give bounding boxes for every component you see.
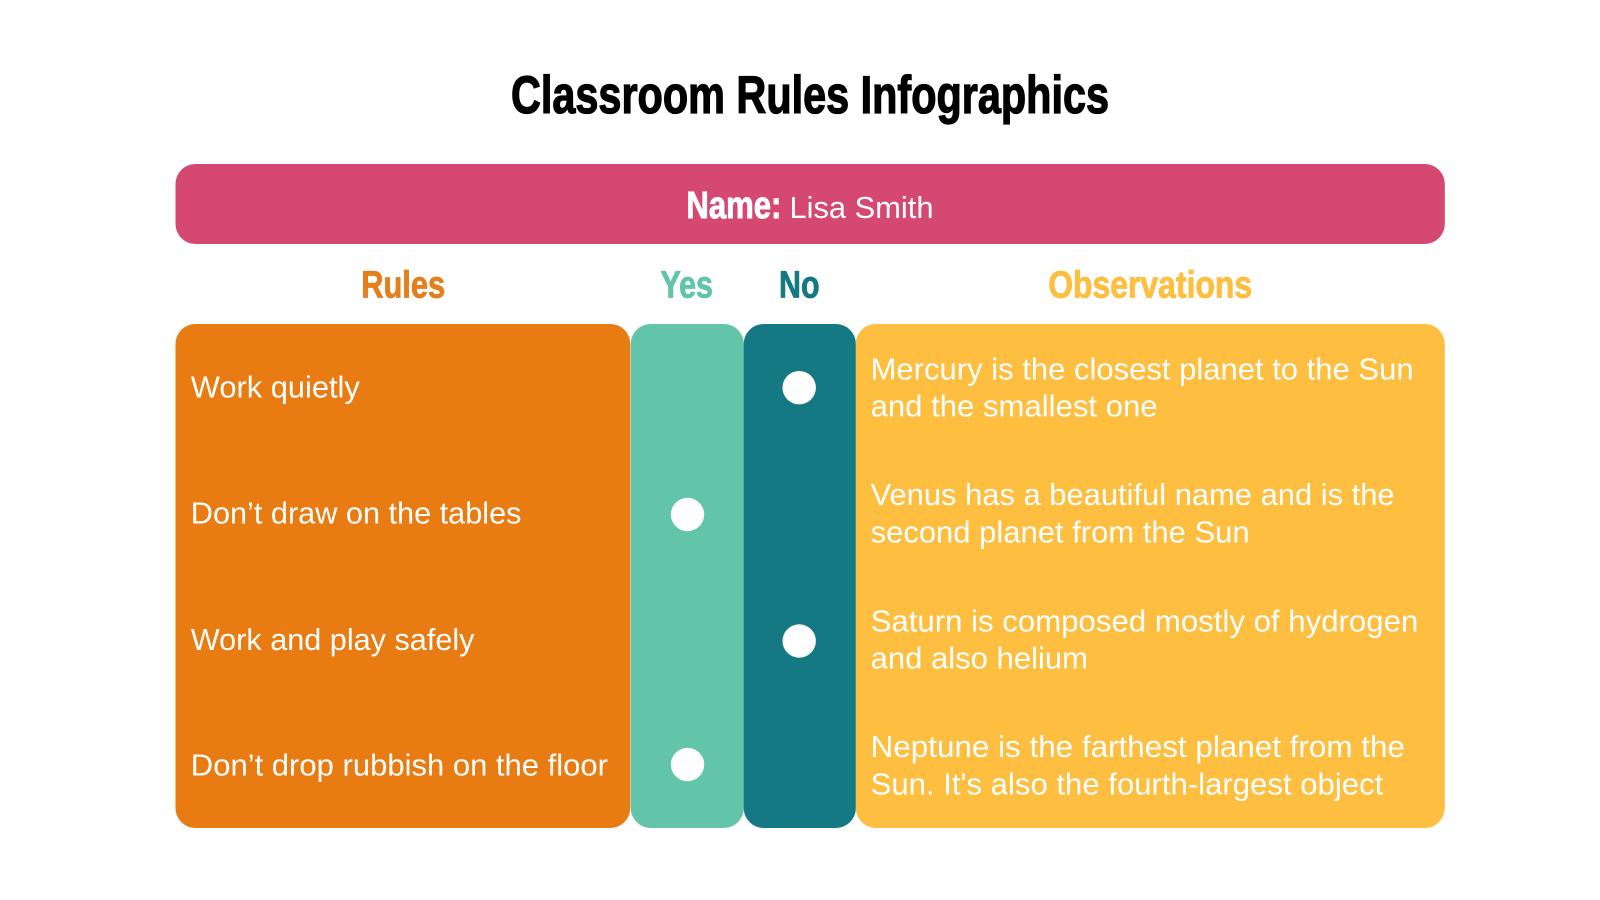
panel: rules <box>176 324 630 828</box>
panel: observations <box>856 324 1445 828</box>
rules column background <box>176 324 630 828</box>
observation: mercury: and the smallest one <box>871 390 1158 424</box>
rule: tables: Don’t draw on the tables <box>191 496 522 530</box>
yes marker: rubbish <box>671 748 704 781</box>
yes column background <box>631 324 744 828</box>
observation: venus: second planet from the Sun <box>871 515 1250 549</box>
yes marker: tables <box>671 498 704 531</box>
observation: venus <box>871 478 1395 549</box>
heading: no: No <box>779 264 820 306</box>
no marker: play safely <box>782 624 816 658</box>
observation: mercury <box>871 352 1414 424</box>
observation: neptune <box>871 730 1405 801</box>
name bar background <box>176 164 1445 244</box>
name label: Name: <box>686 185 781 227</box>
title: Classroom Rules Infographics <box>511 66 1109 125</box>
observation: saturn: Saturn is composed mostly of hydrogen <box>871 604 1418 638</box>
no column background <box>744 324 856 828</box>
heading: yes: Yes <box>660 264 713 306</box>
observation: mercury: Mercury is the closest planet to the Sun <box>871 352 1414 386</box>
observation: venus: Venus has a beautiful name and is the <box>871 478 1395 512</box>
no marker: work quietly <box>782 371 816 404</box>
rule: rubbish: Don’t drop rubbish on the floor <box>191 749 608 783</box>
observation: neptune: Neptune is the farthest planet from the <box>871 730 1405 764</box>
observations column background <box>856 324 1445 828</box>
panel: name bar <box>176 164 1445 244</box>
observation: saturn <box>871 604 1418 675</box>
rule: play safely: Work and play safely <box>191 623 475 657</box>
observation: saturn: and also helium <box>871 641 1088 675</box>
observation: neptune: Sun. It's also the fourth-largest object <box>871 767 1384 801</box>
rule: work quietly: Work quietly <box>191 370 361 404</box>
panel: no column <box>744 324 856 828</box>
heading: observations: Observations <box>1048 264 1252 306</box>
panel: yes column <box>631 324 744 828</box>
name value: Lisa Smith <box>790 191 934 225</box>
heading: rules: Rules <box>361 264 445 306</box>
